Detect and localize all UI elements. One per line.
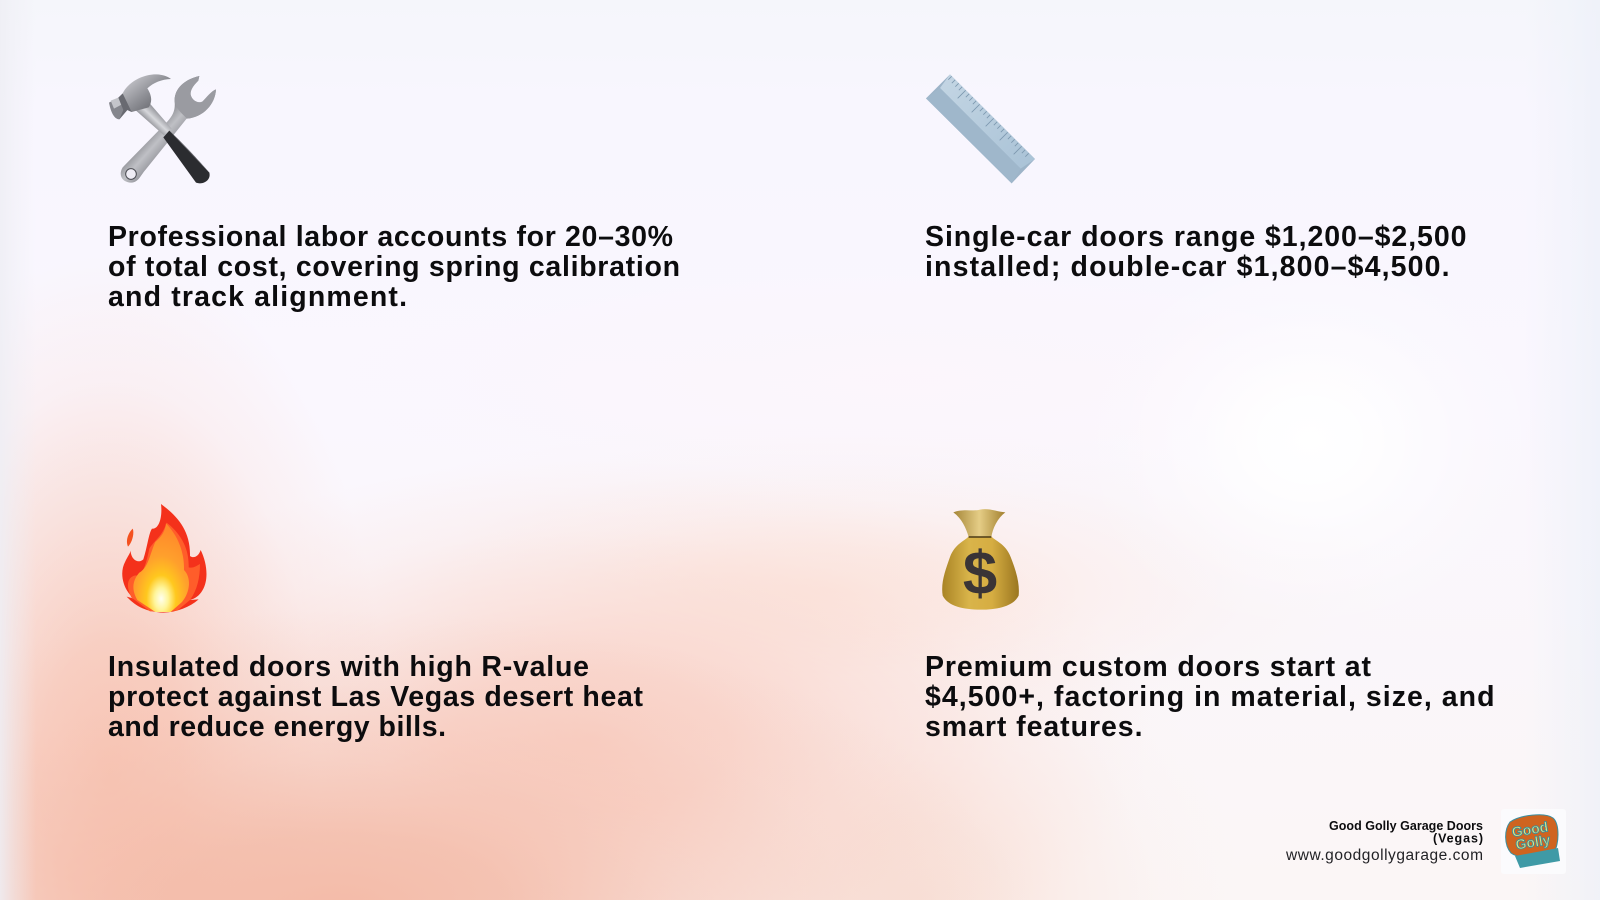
website url: www.goodgollygarage.com <box>1285 847 1483 864</box>
panel: door size pricing <box>925 74 1466 283</box>
text: labor share <box>108 221 680 313</box>
text: premium pricing <box>925 651 1494 743</box>
text: insulation: and reduce energy bills. <box>108 711 446 743</box>
text: door pricing: installed; double-car $1,800–$4,500. <box>925 251 1450 283</box>
icon: hammer and wrench <box>109 74 216 183</box>
text: door pricing: Single-car doors range $1,200–$2,500 <box>925 221 1466 253</box>
panel: labor <box>108 74 680 313</box>
panel: insulation <box>108 504 644 743</box>
company name: (Vegas) <box>1433 832 1483 846</box>
text: labor share: Professional labor accounts for 20–30% <box>108 221 673 253</box>
panel: premium doors <box>925 509 1494 743</box>
icon: money bag: $ <box>963 539 997 608</box>
text: premium pricing: smart features. <box>925 711 1142 743</box>
text: labor share: of total cost, covering spring calibration <box>108 251 680 283</box>
text: premium pricing: $4,500+, factoring in material, size, and <box>925 681 1494 713</box>
text: door pricing <box>925 221 1466 283</box>
logo <box>1501 809 1566 874</box>
icon: ruler <box>926 74 1035 183</box>
text: labor share: and track alignment. <box>108 281 407 313</box>
logo: Golly <box>1514 831 1552 853</box>
company name: Good Golly Garage Doors <box>1329 819 1483 833</box>
text: insulation: Insulated doors with high R-value <box>108 651 589 683</box>
company name <box>1329 819 1483 846</box>
text: premium pricing: Premium custom doors start at <box>925 651 1372 683</box>
footer: company branding <box>1285 809 1566 874</box>
icon: money bag <box>942 509 1019 610</box>
text: insulation <box>108 651 644 743</box>
text: insulation: protect against Las Vegas desert heat <box>108 681 644 713</box>
logo: Good <box>1511 818 1549 840</box>
icon: flame <box>122 504 206 613</box>
